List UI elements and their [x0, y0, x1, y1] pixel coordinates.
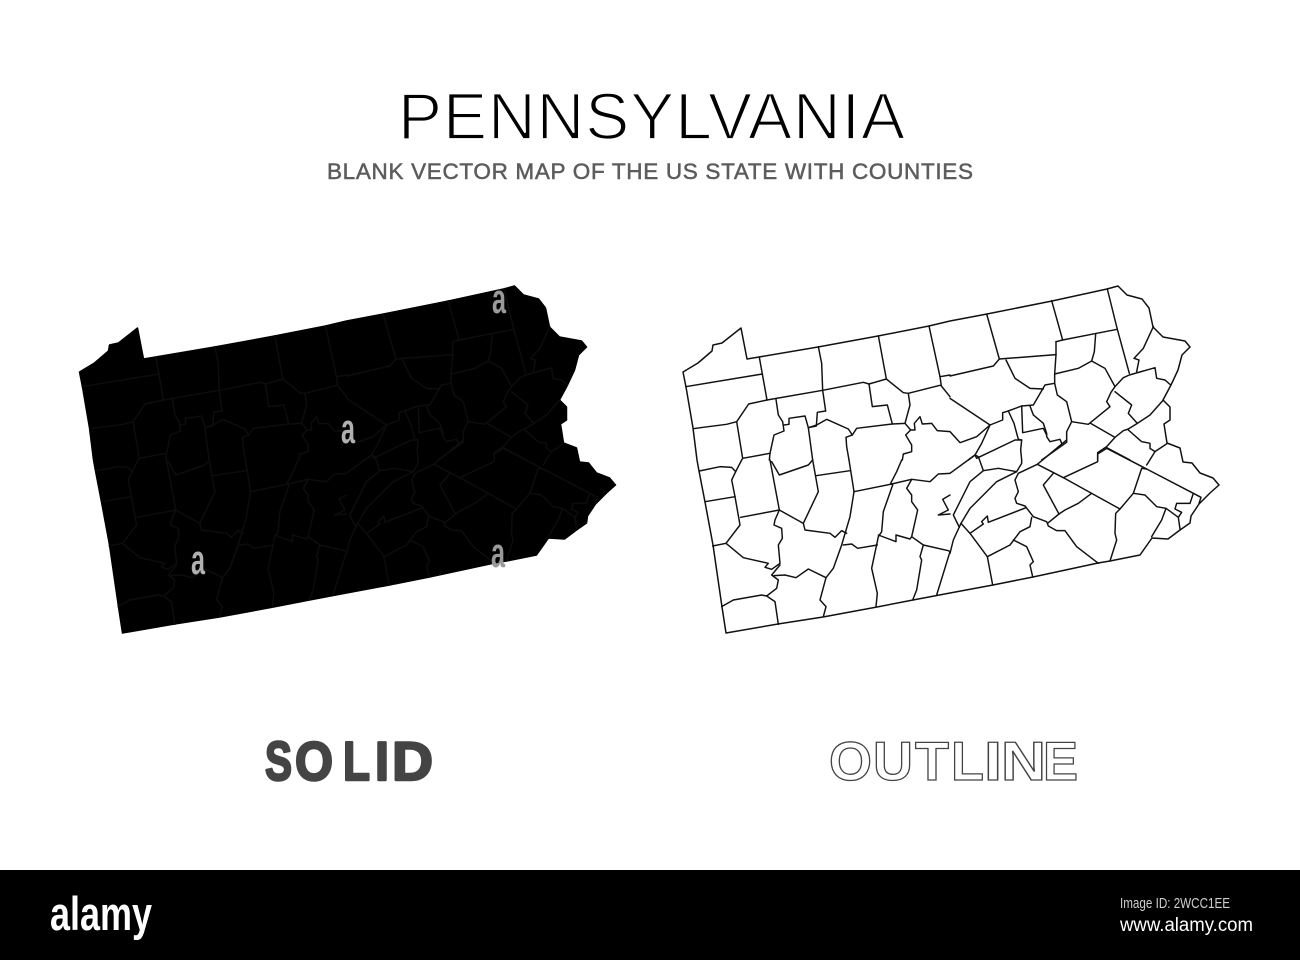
county boundaries	[686, 289, 1201, 624]
label: outline: E	[1043, 730, 1078, 792]
label: solid: S	[265, 730, 292, 792]
label: solid: O	[295, 730, 333, 792]
label: outline: U	[873, 730, 913, 792]
watermark glyph: a	[341, 405, 355, 452]
footer bar	[0, 870, 1300, 960]
label: solid	[265, 730, 433, 792]
label: outline: O	[829, 730, 872, 792]
faint county lines on solid map	[82, 289, 597, 624]
solid state silhouette	[80, 286, 616, 633]
subtitle: BLANK VECTOR MAP OF THE US STATE WITH COUNTIES	[327, 159, 973, 184]
label: outline: T	[915, 730, 949, 792]
label: solid: I	[375, 730, 389, 792]
watermark glyph: a	[491, 529, 505, 576]
label: outline: L	[951, 730, 984, 792]
panel: outline map	[683, 286, 1219, 633]
label: solid: D	[392, 730, 433, 792]
title: PENNSYLVANIA	[398, 79, 905, 153]
panel: solid map	[80, 275, 616, 633]
watermark glyph: a	[191, 536, 205, 583]
state border	[683, 286, 1219, 633]
image id: Image ID: 2WCC1EE	[1120, 895, 1230, 912]
label: outline	[829, 730, 1078, 792]
watermark glyph: a	[492, 275, 506, 322]
label: outline: N	[1001, 730, 1046, 792]
footer logo: alamy	[50, 887, 152, 940]
website: www.alamy.com	[1119, 915, 1253, 936]
label: solid: L	[343, 730, 370, 792]
label: outline: I	[984, 730, 1002, 792]
